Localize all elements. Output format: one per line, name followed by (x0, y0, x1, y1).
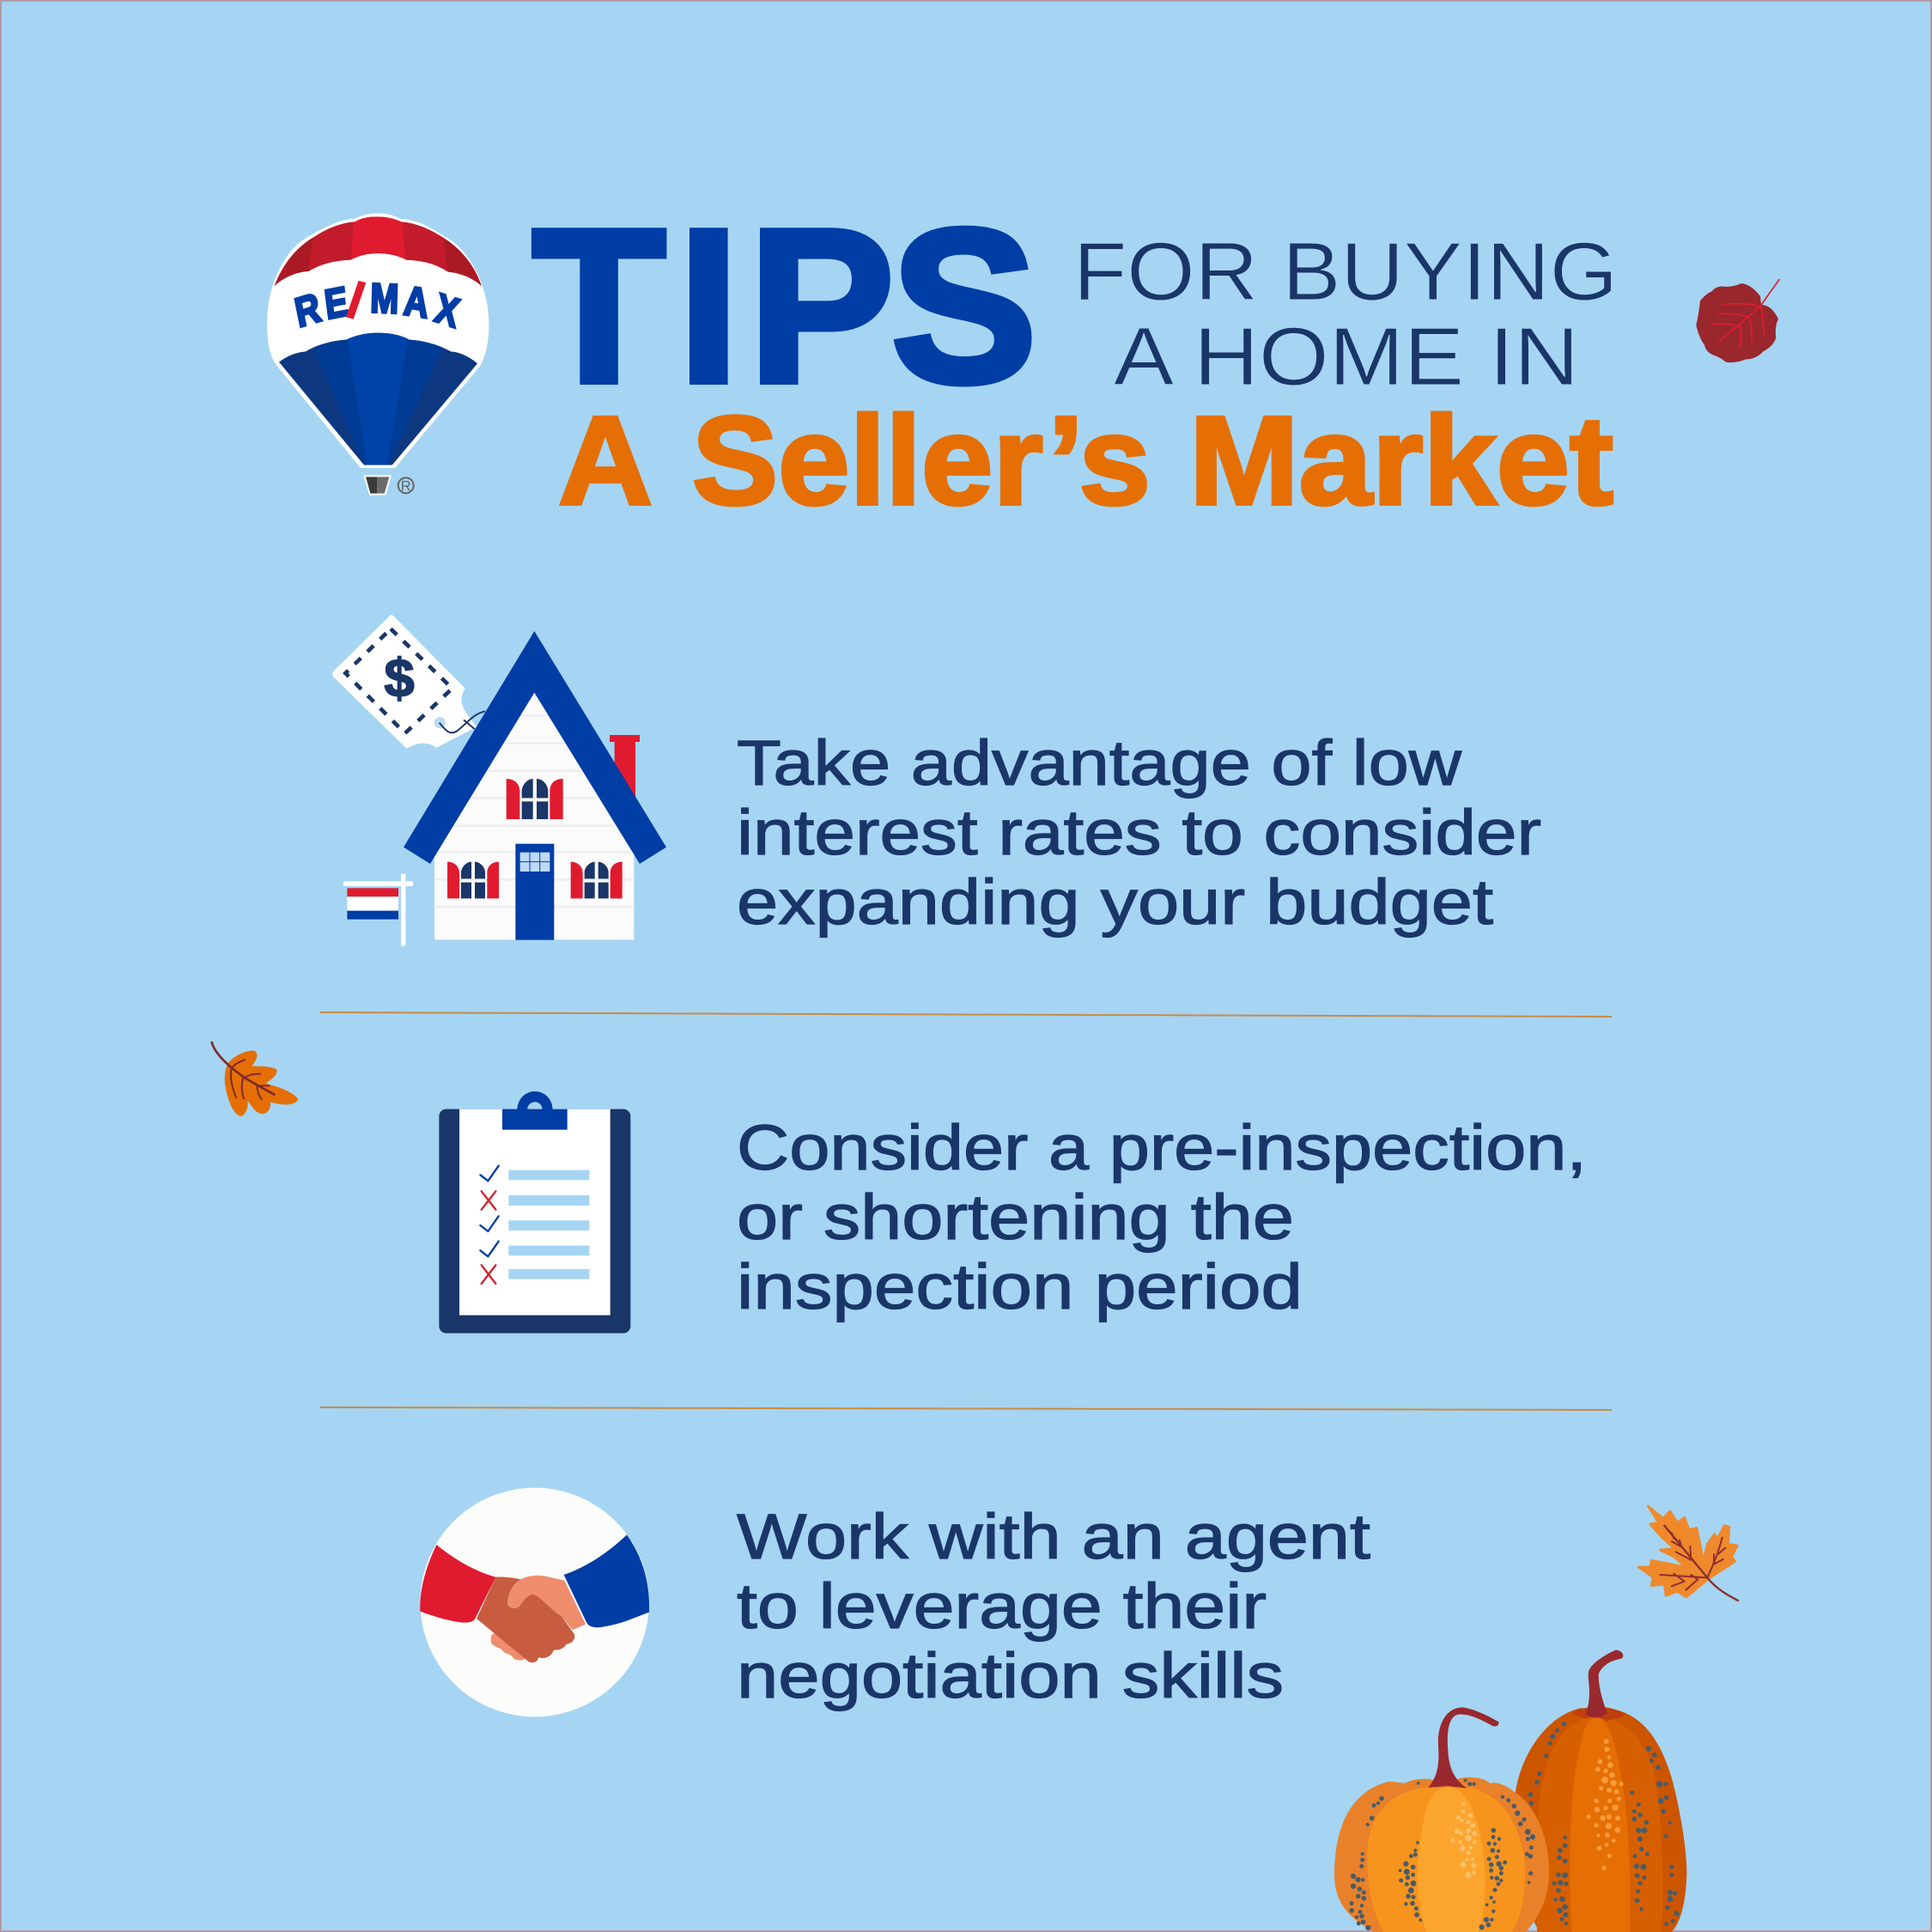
icon: red leaf (1696, 280, 1779, 362)
text: tip 1: interest rates to consider (737, 797, 1541, 868)
icon: chimney (610, 735, 640, 799)
house roof (404, 631, 666, 864)
logo wordmark: A (402, 278, 431, 327)
heading: a seller's market: Market (1189, 391, 1613, 532)
icon: price tag: $ (384, 649, 415, 709)
logo wordmark: R (291, 285, 325, 337)
registered mark: R (401, 478, 411, 495)
illustration: pumpkins (1334, 1650, 1686, 1932)
logo: RE/MAX balloon (267, 212, 489, 495)
registered mark (398, 477, 414, 495)
icon: price tag (332, 615, 485, 749)
title (532, 184, 1618, 532)
text: tip 1: Take advantage of low (737, 727, 1462, 799)
logo wordmark: / (346, 272, 366, 328)
heading: for buying: FOR BUYING (1073, 226, 1618, 318)
text: tip 2 (737, 1112, 1587, 1322)
large pumpkin (1515, 1650, 1686, 1932)
lower left window (447, 862, 499, 898)
heading: a home in: A HOME IN (1114, 311, 1579, 403)
logo wordmark: M (370, 276, 399, 323)
text: tip 3: Work with an agent (737, 1501, 1371, 1572)
small pumpkin (1334, 1707, 1549, 1932)
item 2: clipboard icon (439, 1091, 630, 1334)
door (515, 844, 554, 940)
lower right window (571, 862, 623, 898)
text: tip 1: expanding your budget (737, 866, 1494, 938)
logo wordmark: E (322, 278, 350, 328)
text: tip 2: inspection period (737, 1251, 1303, 1322)
text: tip 2: Consider a pre-inspection, (737, 1112, 1587, 1183)
icon: maple leaf (1638, 1506, 1738, 1601)
heading: TIPS: TIPS (532, 184, 1036, 428)
heading: a seller's market (558, 391, 1613, 532)
logo basket (363, 475, 392, 495)
text: tip 2: or shortening the (737, 1182, 1294, 1253)
upper window (507, 779, 563, 819)
text: tip 1 (737, 727, 1541, 938)
icon: orange oak leaf (212, 1042, 298, 1116)
item 1: house illustration (332, 615, 666, 946)
text: tip 3: negotiation skills (737, 1640, 1284, 1711)
for sale sign (343, 874, 413, 946)
heading: a seller's market: A (558, 391, 653, 532)
text: tip 3 (737, 1501, 1371, 1711)
logo wordmark: X (431, 285, 464, 337)
text: tip 3: to leverage their (737, 1571, 1267, 1642)
item 3: handshake icon (420, 1488, 649, 1716)
heading: a seller's market: Seller’s (692, 391, 1151, 532)
house wall (434, 693, 634, 939)
